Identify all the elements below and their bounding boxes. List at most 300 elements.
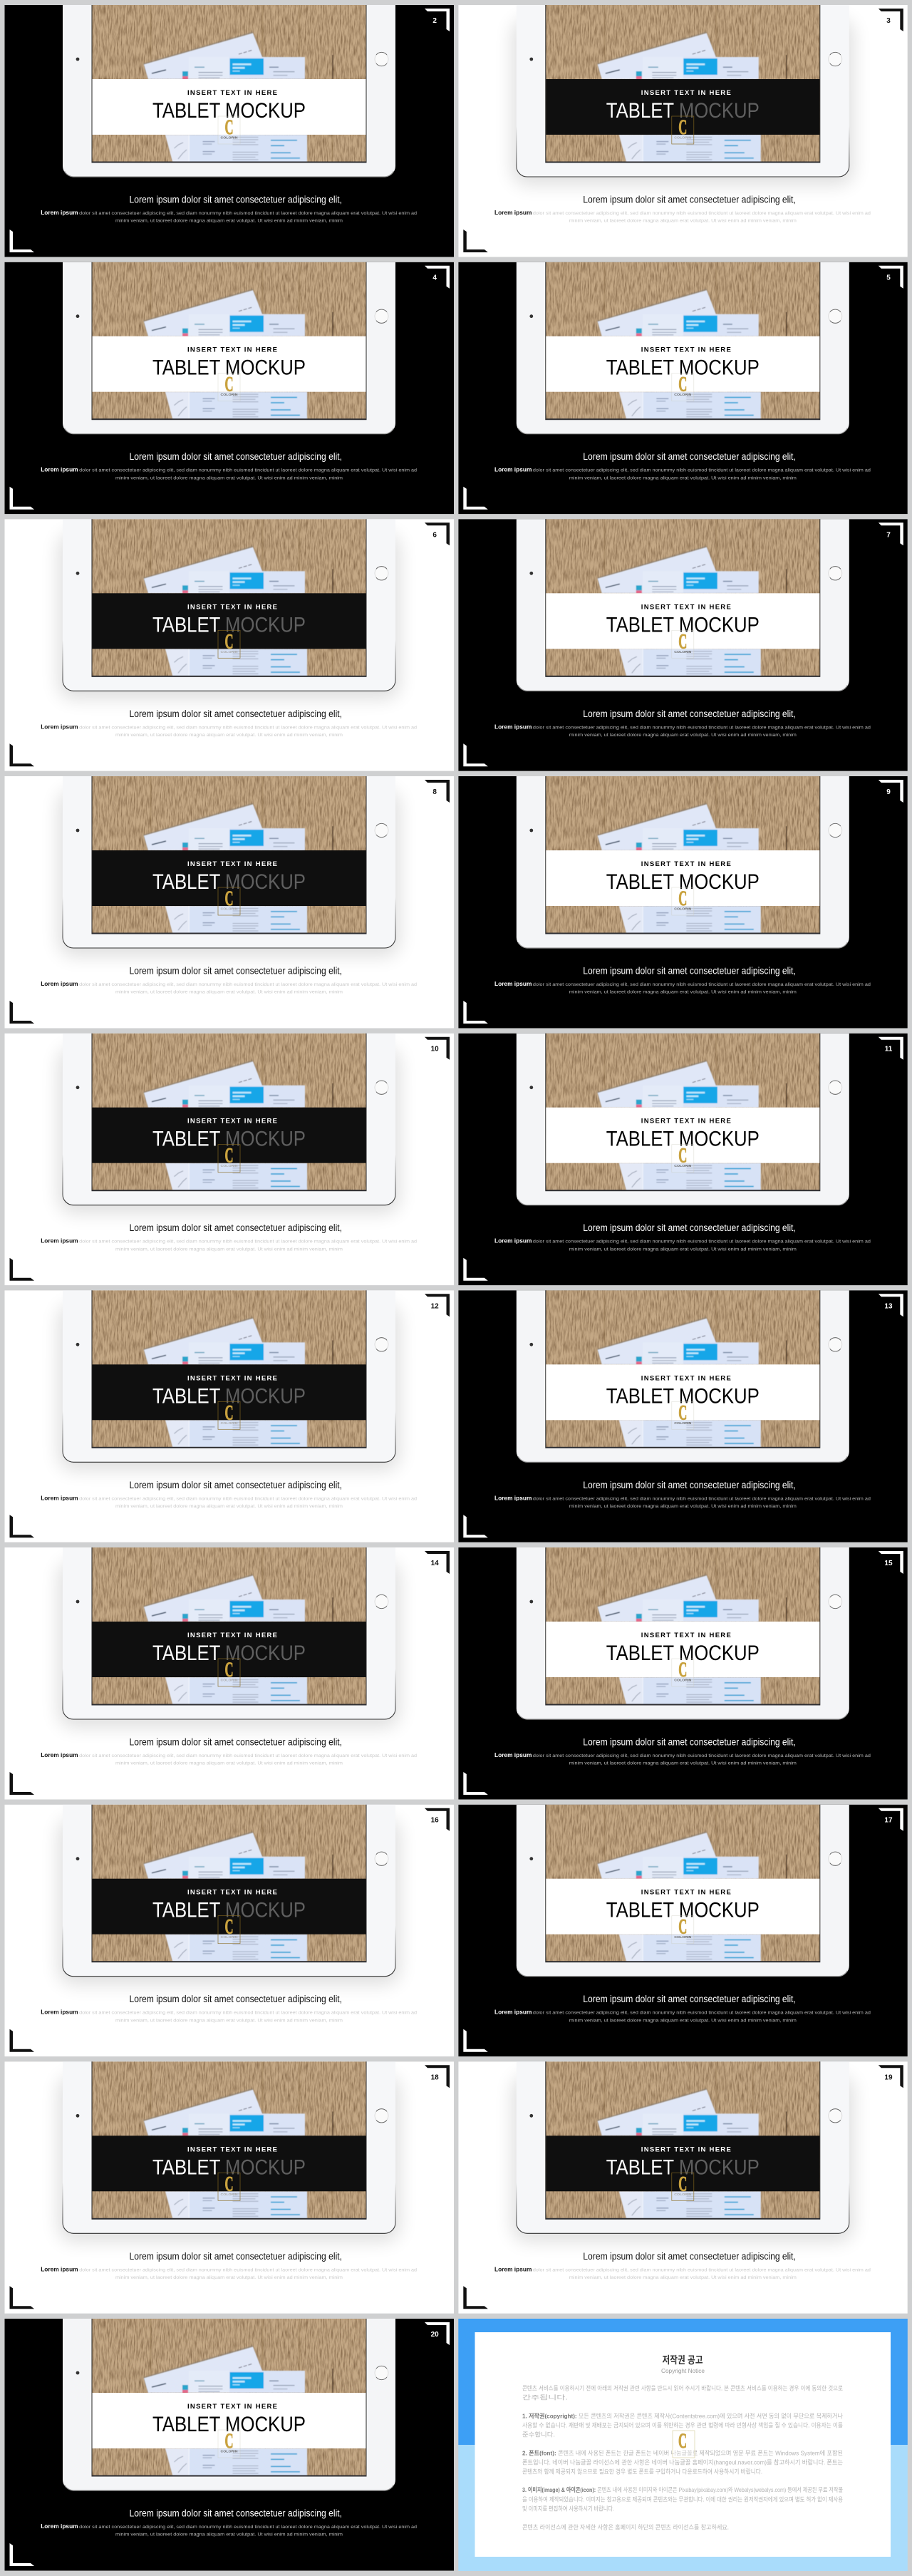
tablet frame xyxy=(63,5,395,177)
heading: Lorem ipsum dolor sit amet consectetuer adipiscing elit, xyxy=(583,709,796,719)
body text: dolor sit amet consectetuer adipiscing elit, sed diam nonummy nibh euismod tincidunt ut laoreet dolore magna aliquam erat volutpat. Ut wisi enim ad xyxy=(533,2267,871,2272)
heading: Lorem ipsum dolor sit amet consectetuer adipiscing elit, xyxy=(130,965,342,977)
logo watermark xyxy=(218,1658,240,1686)
body text: Lorem ipsum xyxy=(41,2523,78,2530)
logo watermark: COLORIN xyxy=(221,1935,238,1939)
logo watermark xyxy=(672,1915,694,1944)
title band xyxy=(546,1879,819,1934)
body text: dolor sit amet consectetuer adipiscing elit, sed diam nonummy nibh euismod tincidunt ut laoreet dolore magna aliquam erat volutpat. Ut wisi enim ad xyxy=(533,1240,871,1245)
body text: dolor sit amet consectetuer adipiscing elit, sed diam nonummy nibh euismod tincidunt ut laoreet dolore magna aliquam erat volutpat. Ut wisi enim ad xyxy=(533,468,871,473)
band subtitle: INSERT TEXT IN HERE xyxy=(187,1374,277,1382)
panel: copyright notice xyxy=(458,2319,908,2571)
page number: 6 xyxy=(432,531,437,539)
body text xyxy=(41,210,417,223)
tablet frame xyxy=(517,1547,849,1719)
title band xyxy=(546,2135,819,2191)
logo watermark: C xyxy=(678,373,687,396)
body text: Lorem ipsum xyxy=(494,2265,532,2272)
tablet screen photo xyxy=(92,517,366,677)
title band xyxy=(93,1364,366,1420)
page number: 7 xyxy=(886,531,891,539)
heading: Lorem ipsum dolor sit amet consectetuer adipiscing elit, xyxy=(130,1222,342,1233)
body text xyxy=(494,980,871,995)
notice intro xyxy=(522,2385,843,2401)
logo watermark: COLORIN xyxy=(674,1164,692,1168)
corner marks xyxy=(10,522,450,766)
body text: minim veniam, ut laoreet dolore magna aliquam erat volutpat. Ut wisi enim ad minim veniam, minim xyxy=(115,990,343,995)
band subtitle: INSERT TEXT IN HERE xyxy=(641,860,731,868)
logo watermark: C xyxy=(678,1658,687,1681)
body text: dolor sit amet consectetuer adipiscing elit, sed diam nonummy nibh euismod tincidunt ut laoreet dolore magna aliquam erat volutpat. Ut wisi enim ad xyxy=(79,211,417,216)
page number: 5 xyxy=(886,274,891,282)
body text: dolor sit amet consectetuer adipiscing elit, sed diam nonummy nibh euismod tincidunt ut laoreet dolore magna aliquam erat volutpat. Ut wisi enim ad xyxy=(79,2525,417,2530)
tablet frame xyxy=(517,519,849,691)
heading: Lorem ipsum dolor sit amet consectetuer adipiscing elit, xyxy=(583,1736,796,1748)
body text: dolor sit amet consectetuer adipiscing elit, sed diam nonummy nibh euismod tincidunt ut laoreet dolore magna aliquam erat volutpat. Ut wisi enim ad xyxy=(79,1240,417,1245)
body text: minim veniam, ut laoreet dolore magna aliquam erat volutpat. Ut wisi enim ad minim veniam, minim xyxy=(569,219,797,224)
slide background xyxy=(4,2319,454,2570)
logo watermark: COLORIN xyxy=(221,135,238,140)
licence note: 콘텐츠 라이선스에 관한 자세한 사항은 홈페이지 하단의 콘텐츠 라이선스를 참고하세요. xyxy=(522,2523,729,2530)
slide 6 xyxy=(4,517,454,771)
corner marks xyxy=(463,2065,903,2309)
title band xyxy=(93,79,366,135)
section 3 image and icon: 3. 이미지(image) & 아이콘(icon): 콘텐츠 내에 사용된 이미지와 아이콘은 Pixabay(pixabay.com)와 Webalys(webalys.com) 등에서 제공된 무료 저작물 xyxy=(522,2486,843,2493)
logo watermark: COLORIN xyxy=(674,1421,692,1425)
body text: Lorem ipsum xyxy=(494,1494,532,1501)
band subtitle: INSERT TEXT IN HERE xyxy=(641,1632,731,1639)
tablet screen photo xyxy=(546,1032,820,1191)
body text xyxy=(41,980,417,995)
page number: 8 xyxy=(432,788,437,796)
logo watermark: COLORIN xyxy=(221,1164,238,1168)
heading: Lorem ipsum dolor sit amet consectetuer adipiscing elit, xyxy=(583,2251,796,2262)
band subtitle: INSERT TEXT IN HERE xyxy=(641,1374,731,1382)
body text xyxy=(494,1237,871,1252)
slide background xyxy=(458,1547,908,1799)
tablet frame xyxy=(58,2061,399,2241)
corner marks xyxy=(10,1294,450,1537)
band title: TABLET MOCKUP xyxy=(606,870,760,894)
band subtitle: INSERT TEXT IN HERE xyxy=(641,1118,731,1125)
tablet frame xyxy=(512,2061,853,2241)
tablet screen photo xyxy=(92,261,366,420)
slide 20 xyxy=(4,2317,454,2570)
slide 8 xyxy=(4,775,454,1028)
logo watermark: COLORIN xyxy=(674,2193,692,2196)
band title: TABLET MOCKUP xyxy=(606,2155,760,2179)
heading: Lorem ipsum dolor sit amet consectetuer adipiscing elit, xyxy=(583,965,796,977)
body text xyxy=(41,2009,417,2023)
tablet frame xyxy=(63,2319,395,2490)
heading: Lorem ipsum dolor sit amet consectetuer adipiscing elit, xyxy=(583,1222,796,1233)
logo watermark xyxy=(672,629,694,658)
tablet frame xyxy=(58,776,399,956)
logo watermark xyxy=(672,115,694,144)
body text: Lorem ipsum xyxy=(494,466,532,473)
corner marks xyxy=(463,9,903,252)
body text: minim veniam, ut laoreet dolore magna aliquam erat volutpat. Ut wisi enim ad minim veniam, minim xyxy=(569,990,797,995)
band title: TABLET MOCKUP xyxy=(152,2155,306,2179)
body text: Lorem ipsum xyxy=(41,2009,78,2016)
band subtitle: INSERT TEXT IN HERE xyxy=(641,2145,731,2153)
logo watermark xyxy=(672,1401,694,1429)
body text: dolor sit amet consectetuer adipiscing elit, sed diam nonummy nibh euismod tincidunt ut laoreet dolore magna aliquam erat volutpat. Ut wisi enim ad xyxy=(79,982,417,987)
corner marks xyxy=(463,780,903,1024)
slide 4 xyxy=(4,261,454,514)
body text: minim veniam, ut laoreet dolore magna aliquam erat volutpat. Ut wisi enim ad minim veniam, minim xyxy=(569,2018,797,2023)
logo watermark: COLORIN xyxy=(221,2193,238,2196)
band subtitle: INSERT TEXT IN HERE xyxy=(641,1889,731,1897)
body text xyxy=(41,466,417,480)
slide 18 xyxy=(4,2060,454,2314)
title band xyxy=(546,1364,819,1420)
tablet screen photo xyxy=(92,775,366,934)
section 3 image and icon: 을 이용하여 제작되었습니다. 이미지는 참고용으로 제공되며 콘텐츠와는 무관합니다. 이에 대한 권리는 원저작권자에게 있으며 별도 허가 없이 재사용 xyxy=(522,2496,843,2503)
body text: minim veniam, ut laoreet dolore magna aliquam erat volutpat. Ut wisi enim ad minim veniam, minim xyxy=(115,2533,343,2538)
heading: Lorem ipsum dolor sit amet consectetuer adipiscing elit, xyxy=(583,1480,796,1490)
body text: minim veniam, ut laoreet dolore magna aliquam erat volutpat. Ut wisi enim ad minim veniam, minim xyxy=(569,2275,797,2280)
tablet frame xyxy=(517,776,849,948)
band title: TABLET MOCKUP xyxy=(152,1899,306,1922)
body text: dolor sit amet consectetuer adipiscing elit, sed diam nonummy nibh euismod tincidunt ut laoreet dolore magna aliquam erat volutpat. Ut wisi enim ad xyxy=(79,725,417,730)
page number: 10 xyxy=(431,1046,439,1053)
heading: Lorem ipsum dolor sit amet consectetuer adipiscing elit, xyxy=(130,2508,342,2519)
page number: 17 xyxy=(884,1817,893,1825)
logo watermark xyxy=(672,1658,694,1686)
tablet frame xyxy=(517,262,849,434)
slide 16 xyxy=(4,1803,454,2056)
logo watermark xyxy=(673,2429,695,2458)
band title: TABLET MOCKUP xyxy=(606,99,760,123)
logo watermark: C xyxy=(225,1658,234,1681)
white card xyxy=(475,2332,891,2557)
band subtitle: INSERT TEXT IN HERE xyxy=(187,860,277,868)
band title: TABLET MOCKUP xyxy=(606,1128,760,1151)
corner marks xyxy=(463,266,903,510)
corner marks xyxy=(10,780,450,1024)
slide background xyxy=(4,2061,454,2314)
logo watermark: COLORIN xyxy=(221,1678,238,1682)
title band xyxy=(546,336,819,392)
body text: minim veniam, ut laoreet dolore magna aliquam erat volutpat. Ut wisi enim ad minim veniam, minim xyxy=(569,1504,797,1509)
body text: minim veniam, ut laoreet dolore magna aliquam erat volutpat. Ut wisi enim ad minim veniam, minim xyxy=(115,1247,343,1252)
band subtitle: INSERT TEXT IN HERE xyxy=(187,2403,277,2411)
tablet screen photo xyxy=(92,1289,366,1448)
section 1 copyright: 1. 저작권(copyright): 모든 콘텐츠의 저작권은 콘텐츠 제작사(Contentstree.com)에 있으며 사전 서면 동의 없이 무단으로 복제하거나 xyxy=(522,2412,843,2419)
tablet screen photo xyxy=(92,1032,366,1191)
page number: 19 xyxy=(884,2073,893,2081)
logo watermark: C xyxy=(225,1401,234,1424)
logo watermark: COLORIN xyxy=(221,907,238,911)
heading: Lorem ipsum dolor sit amet consectetuer adipiscing elit, xyxy=(130,1994,342,2004)
band subtitle: INSERT TEXT IN HERE xyxy=(187,2145,277,2153)
heading: Lorem ipsum dolor sit amet consectetuer adipiscing elit, xyxy=(583,194,796,205)
title band xyxy=(546,1108,819,1163)
title band xyxy=(93,2393,366,2448)
corner marks xyxy=(10,266,450,510)
body text xyxy=(494,723,871,738)
slide background xyxy=(4,262,454,514)
page number: 16 xyxy=(431,1817,439,1825)
title band xyxy=(546,79,819,135)
page number: 12 xyxy=(431,1302,439,1310)
slide background xyxy=(4,5,454,257)
body text xyxy=(41,1751,417,1766)
slide 15 xyxy=(458,1546,908,1799)
logo watermark xyxy=(672,373,694,401)
title band xyxy=(93,2135,366,2191)
light blue bottom background xyxy=(458,2445,908,2571)
tablet screen photo xyxy=(92,4,366,163)
section 3 image and icon xyxy=(522,2486,843,2512)
body text: Lorem ipsum xyxy=(41,980,78,987)
blue top background xyxy=(458,2319,908,2445)
title band xyxy=(546,850,819,906)
slide background xyxy=(4,1805,454,2056)
page number: 2 xyxy=(432,17,437,25)
title band xyxy=(546,593,819,649)
slide background xyxy=(458,1034,908,1285)
tablet screen photo xyxy=(92,2060,366,2220)
band subtitle: INSERT TEXT IN HERE xyxy=(187,89,277,97)
logo watermark xyxy=(218,2172,240,2200)
section 2 font: 2. 폰트(font): 콘텐츠 내에 사용된 폰트는 한글 폰트는 네이버 나눔글꼴로 제작되었으며 영문 무료 폰트는 Windows System에 포함된 xyxy=(522,2449,843,2456)
body text xyxy=(494,2265,871,2280)
tablet screen photo xyxy=(546,261,820,420)
logo watermark: C xyxy=(678,887,687,910)
heading: Lorem ipsum dolor sit amet consectetuer adipiscing elit, xyxy=(130,1736,342,1748)
page number: 13 xyxy=(884,1302,893,1310)
logo watermark: C xyxy=(678,1144,687,1168)
body text xyxy=(41,2265,417,2280)
section 1 copyright xyxy=(522,2412,843,2438)
section 2 font: 폰트입니다. 네이버 나눔글꼴 라이선스에 관한 사항은 네이버 나눔글꼴 홈페이지(hangeul.naver.com)를 참고하시기 바랍니다. 폰트는 xyxy=(522,2459,843,2466)
body text: Lorem ipsum xyxy=(41,1494,78,1501)
logo watermark: C xyxy=(225,629,234,653)
slide 19 xyxy=(458,2060,908,2314)
page number: 3 xyxy=(886,17,891,25)
body text xyxy=(494,466,871,480)
logo watermark: COLORIN xyxy=(674,393,692,396)
band title: TABLET MOCKUP xyxy=(606,1899,760,1922)
logo watermark xyxy=(672,2172,694,2200)
body text: Lorem ipsum xyxy=(494,1237,532,1245)
logo watermark: COLORIN xyxy=(674,1935,692,1939)
body text: Lorem ipsum xyxy=(494,2009,532,2016)
slide background xyxy=(4,1290,454,1542)
slide 7 xyxy=(458,517,908,771)
slide background xyxy=(458,5,908,257)
title band xyxy=(93,1108,366,1163)
body text xyxy=(41,2523,417,2538)
logo watermark: COLORIN xyxy=(674,650,692,654)
logo watermark: C xyxy=(678,1401,687,1424)
slide 12 xyxy=(4,1289,454,1542)
band subtitle: INSERT TEXT IN HERE xyxy=(187,1889,277,1897)
logo watermark xyxy=(218,1915,240,1944)
body text: minim veniam, ut laoreet dolore magna aliquam erat volutpat. Ut wisi enim ad minim veniam, minim xyxy=(115,1504,343,1509)
band title: TABLET MOCKUP xyxy=(152,1128,306,1151)
body text: dolor sit amet consectetuer adipiscing elit, sed diam nonummy nibh euismod tincidunt ut laoreet dolore magna aliquam erat volutpat. Ut wisi enim ad xyxy=(533,1496,871,1501)
body text: minim veniam, ut laoreet dolore magna aliquam erat volutpat. Ut wisi enim ad minim veniam, minim xyxy=(115,2018,343,2023)
slide 3 xyxy=(458,4,908,257)
page number: 18 xyxy=(431,2073,439,2081)
corner marks xyxy=(10,1808,450,2052)
band subtitle: INSERT TEXT IN HERE xyxy=(187,603,277,611)
body text xyxy=(494,1751,871,1766)
band title: TABLET MOCKUP xyxy=(152,2413,306,2436)
title band xyxy=(93,593,366,649)
body text: minim veniam, ut laoreet dolore magna aliquam erat volutpat. Ut wisi enim ad minim veniam, minim xyxy=(569,1761,797,1766)
logo watermark: C xyxy=(678,2172,687,2195)
band title: TABLET MOCKUP xyxy=(152,356,306,380)
title band xyxy=(93,850,366,906)
heading: Lorem ipsum dolor sit amet consectetuer adipiscing elit, xyxy=(130,194,342,205)
body text: dolor sit amet consectetuer adipiscing elit, sed diam nonummy nibh euismod tincidunt ut laoreet dolore magna aliquam erat volutpat. Ut wisi enim ad xyxy=(79,2011,417,2016)
body text: dolor sit amet consectetuer adipiscing elit, sed diam nonummy nibh euismod tincidunt ut laoreet dolore magna aliquam erat volutpat. Ut wisi enim ad xyxy=(79,468,417,473)
logo watermark: C xyxy=(225,1144,234,1168)
heading: Lorem ipsum dolor sit amet consectetuer adipiscing elit, xyxy=(583,451,796,462)
body text: Lorem ipsum xyxy=(494,209,532,216)
band title: TABLET MOCKUP xyxy=(152,870,306,894)
tablet screen photo xyxy=(92,1546,366,1705)
tablet frame xyxy=(58,1290,399,1470)
body text: Lorem ipsum xyxy=(494,723,532,730)
logo watermark xyxy=(218,373,240,401)
title band xyxy=(93,1622,366,1677)
slide background xyxy=(4,776,454,1028)
logo watermark: C xyxy=(678,115,687,139)
page number: 9 xyxy=(886,788,891,796)
body text: minim veniam, ut laoreet dolore magna aliquam erat volutpat. Ut wisi enim ad minim veniam, minim xyxy=(569,1247,797,1252)
section 2 font: 콘텐츠와 함께 제공되지 않으므로 필요한 경우 별도 폰트를 구입하거나 다운로드하여 사용하시기 바랍니다. xyxy=(522,2468,762,2475)
page number: 15 xyxy=(884,1560,893,1567)
tablet frame xyxy=(512,5,853,185)
slide 11 xyxy=(458,1032,908,1285)
tablet screen photo xyxy=(92,2317,366,2476)
page number: 14 xyxy=(431,1560,439,1567)
logo watermark: COLORIN xyxy=(674,907,692,911)
band title: TABLET MOCKUP xyxy=(606,613,760,637)
body text: minim veniam, ut laoreet dolore magna aliquam erat volutpat. Ut wisi enim ad minim veniam, minim xyxy=(569,475,797,480)
body text: Lorem ipsum xyxy=(494,980,532,987)
band subtitle: INSERT TEXT IN HERE xyxy=(641,89,731,97)
body text xyxy=(494,210,871,223)
logo watermark xyxy=(218,115,240,144)
band subtitle: INSERT TEXT IN HERE xyxy=(641,346,731,354)
logo watermark: COLORIN xyxy=(221,393,238,396)
tablet screen photo xyxy=(92,1803,366,1962)
body text xyxy=(41,1494,417,1509)
title band xyxy=(93,336,366,392)
band title: TABLET MOCKUP xyxy=(152,613,306,637)
slide 2 xyxy=(4,4,454,257)
body text: minim veniam, ut laoreet dolore magna aliquam erat volutpat. Ut wisi enim ad minim veniam, minim xyxy=(115,1761,343,1766)
body text xyxy=(494,2009,871,2023)
logo watermark xyxy=(218,1144,240,1173)
logo watermark: C xyxy=(225,887,234,910)
section 3 image and icon: 및 이미지를 편집하여 사용하시기 바랍니다. xyxy=(522,2505,614,2512)
corner marks xyxy=(10,9,450,252)
body text: minim veniam, ut laoreet dolore magna aliquam erat volutpat. Ut wisi enim ad minim veniam, minim xyxy=(115,475,343,480)
band subtitle: INSERT TEXT IN HERE xyxy=(641,603,731,611)
logo watermark: C xyxy=(225,1915,234,1939)
corner marks xyxy=(463,1551,903,1795)
slide background xyxy=(458,776,908,1028)
tablet frame xyxy=(58,1034,399,1213)
corner marks xyxy=(463,1808,903,2052)
slide background xyxy=(458,262,908,514)
logo watermark xyxy=(672,887,694,915)
body text: dolor sit amet consectetuer adipiscing elit, sed diam nonummy nibh euismod tincidunt ut laoreet dolore magna aliquam erat volutpat. Ut wisi enim ad xyxy=(533,725,871,730)
section 1 copyright: 준수합니다. xyxy=(522,2431,555,2438)
page number: 11 xyxy=(885,1046,893,1053)
body text: minim veniam, ut laoreet dolore magna aliquam erat volutpat. Ut wisi enim ad minim veniam, minim xyxy=(115,733,343,738)
tablet frame xyxy=(58,1805,399,1984)
notice intro: 콘텐츠 서비스를 이용하시기 전에 아래의 저작권 관련 사항을 반드시 읽어 주시기 바랍니다. 본 콘텐츠 서비스를 이용하는 경우 이에 동의한 것으로 xyxy=(522,2385,843,2392)
slide 17 xyxy=(458,1803,908,2056)
body text: minim veniam, ut laoreet dolore magna aliquam erat volutpat. Ut wisi enim ad minim veniam, minim xyxy=(115,2275,343,2280)
logo watermark: COLORIN xyxy=(674,1678,692,1682)
slide 9 xyxy=(458,775,908,1028)
heading: Lorem ipsum dolor sit amet consectetuer adipiscing elit, xyxy=(130,2251,342,2262)
heading: Lorem ipsum dolor sit amet consectetuer adipiscing elit, xyxy=(130,451,342,462)
band subtitle: INSERT TEXT IN HERE xyxy=(187,1118,277,1125)
logo watermark xyxy=(218,2429,240,2458)
corner marks xyxy=(463,1294,903,1537)
logo watermark: C xyxy=(678,2429,687,2453)
slide 13 xyxy=(458,1289,908,1542)
tablet screen photo xyxy=(546,517,820,677)
band title: TABLET MOCKUP xyxy=(606,1642,760,1665)
tablet screen photo xyxy=(546,4,820,163)
title band xyxy=(546,1622,819,1677)
notice subtitle: Copyright Notice xyxy=(661,2367,705,2374)
tablet frame xyxy=(58,1547,399,1727)
band subtitle: INSERT TEXT IN HERE xyxy=(187,346,277,354)
page number: 20 xyxy=(431,2331,439,2339)
slide background xyxy=(4,1547,454,1799)
logo watermark: COLORIN xyxy=(221,2449,238,2453)
logo watermark xyxy=(672,1144,694,1173)
tablet frame xyxy=(517,1034,849,1205)
logo watermark: COLORIN xyxy=(221,1421,238,1425)
tablet frame xyxy=(58,519,399,699)
logo watermark: COLORIN xyxy=(221,650,238,654)
heading: Lorem ipsum dolor sit amet consectetuer adipiscing elit, xyxy=(583,1994,796,2004)
tablet frame xyxy=(63,262,395,434)
body text xyxy=(41,723,417,738)
logo watermark: C xyxy=(678,629,687,653)
logo watermark: C xyxy=(225,115,234,139)
corner marks xyxy=(10,1551,450,1795)
band subtitle: INSERT TEXT IN HERE xyxy=(187,1632,277,1639)
slide 10 xyxy=(4,1032,454,1285)
body text: dolor sit amet consectetuer adipiscing elit, sed diam nonummy nibh euismod tincidunt ut laoreet dolore magna aliquam erat volutpat. Ut wisi enim ad xyxy=(533,211,871,216)
body text: dolor sit amet consectetuer adipiscing elit, sed diam nonummy nibh euismod tincidunt ut laoreet dolore magna aliquam erat volutpat. Ut wisi enim ad xyxy=(533,982,871,987)
slide background xyxy=(4,519,454,771)
body text: Lorem ipsum xyxy=(41,209,78,216)
logo watermark: C xyxy=(225,373,234,396)
page number: 4 xyxy=(432,274,437,282)
heading: Lorem ipsum dolor sit amet consectetuer adipiscing elit, xyxy=(130,709,342,719)
band title: TABLET MOCKUP xyxy=(152,1384,306,1408)
band title: TABLET MOCKUP xyxy=(606,1384,760,1408)
body text: Lorem ipsum xyxy=(41,466,78,473)
corner marks xyxy=(463,1037,903,1281)
logo watermark xyxy=(218,1401,240,1429)
